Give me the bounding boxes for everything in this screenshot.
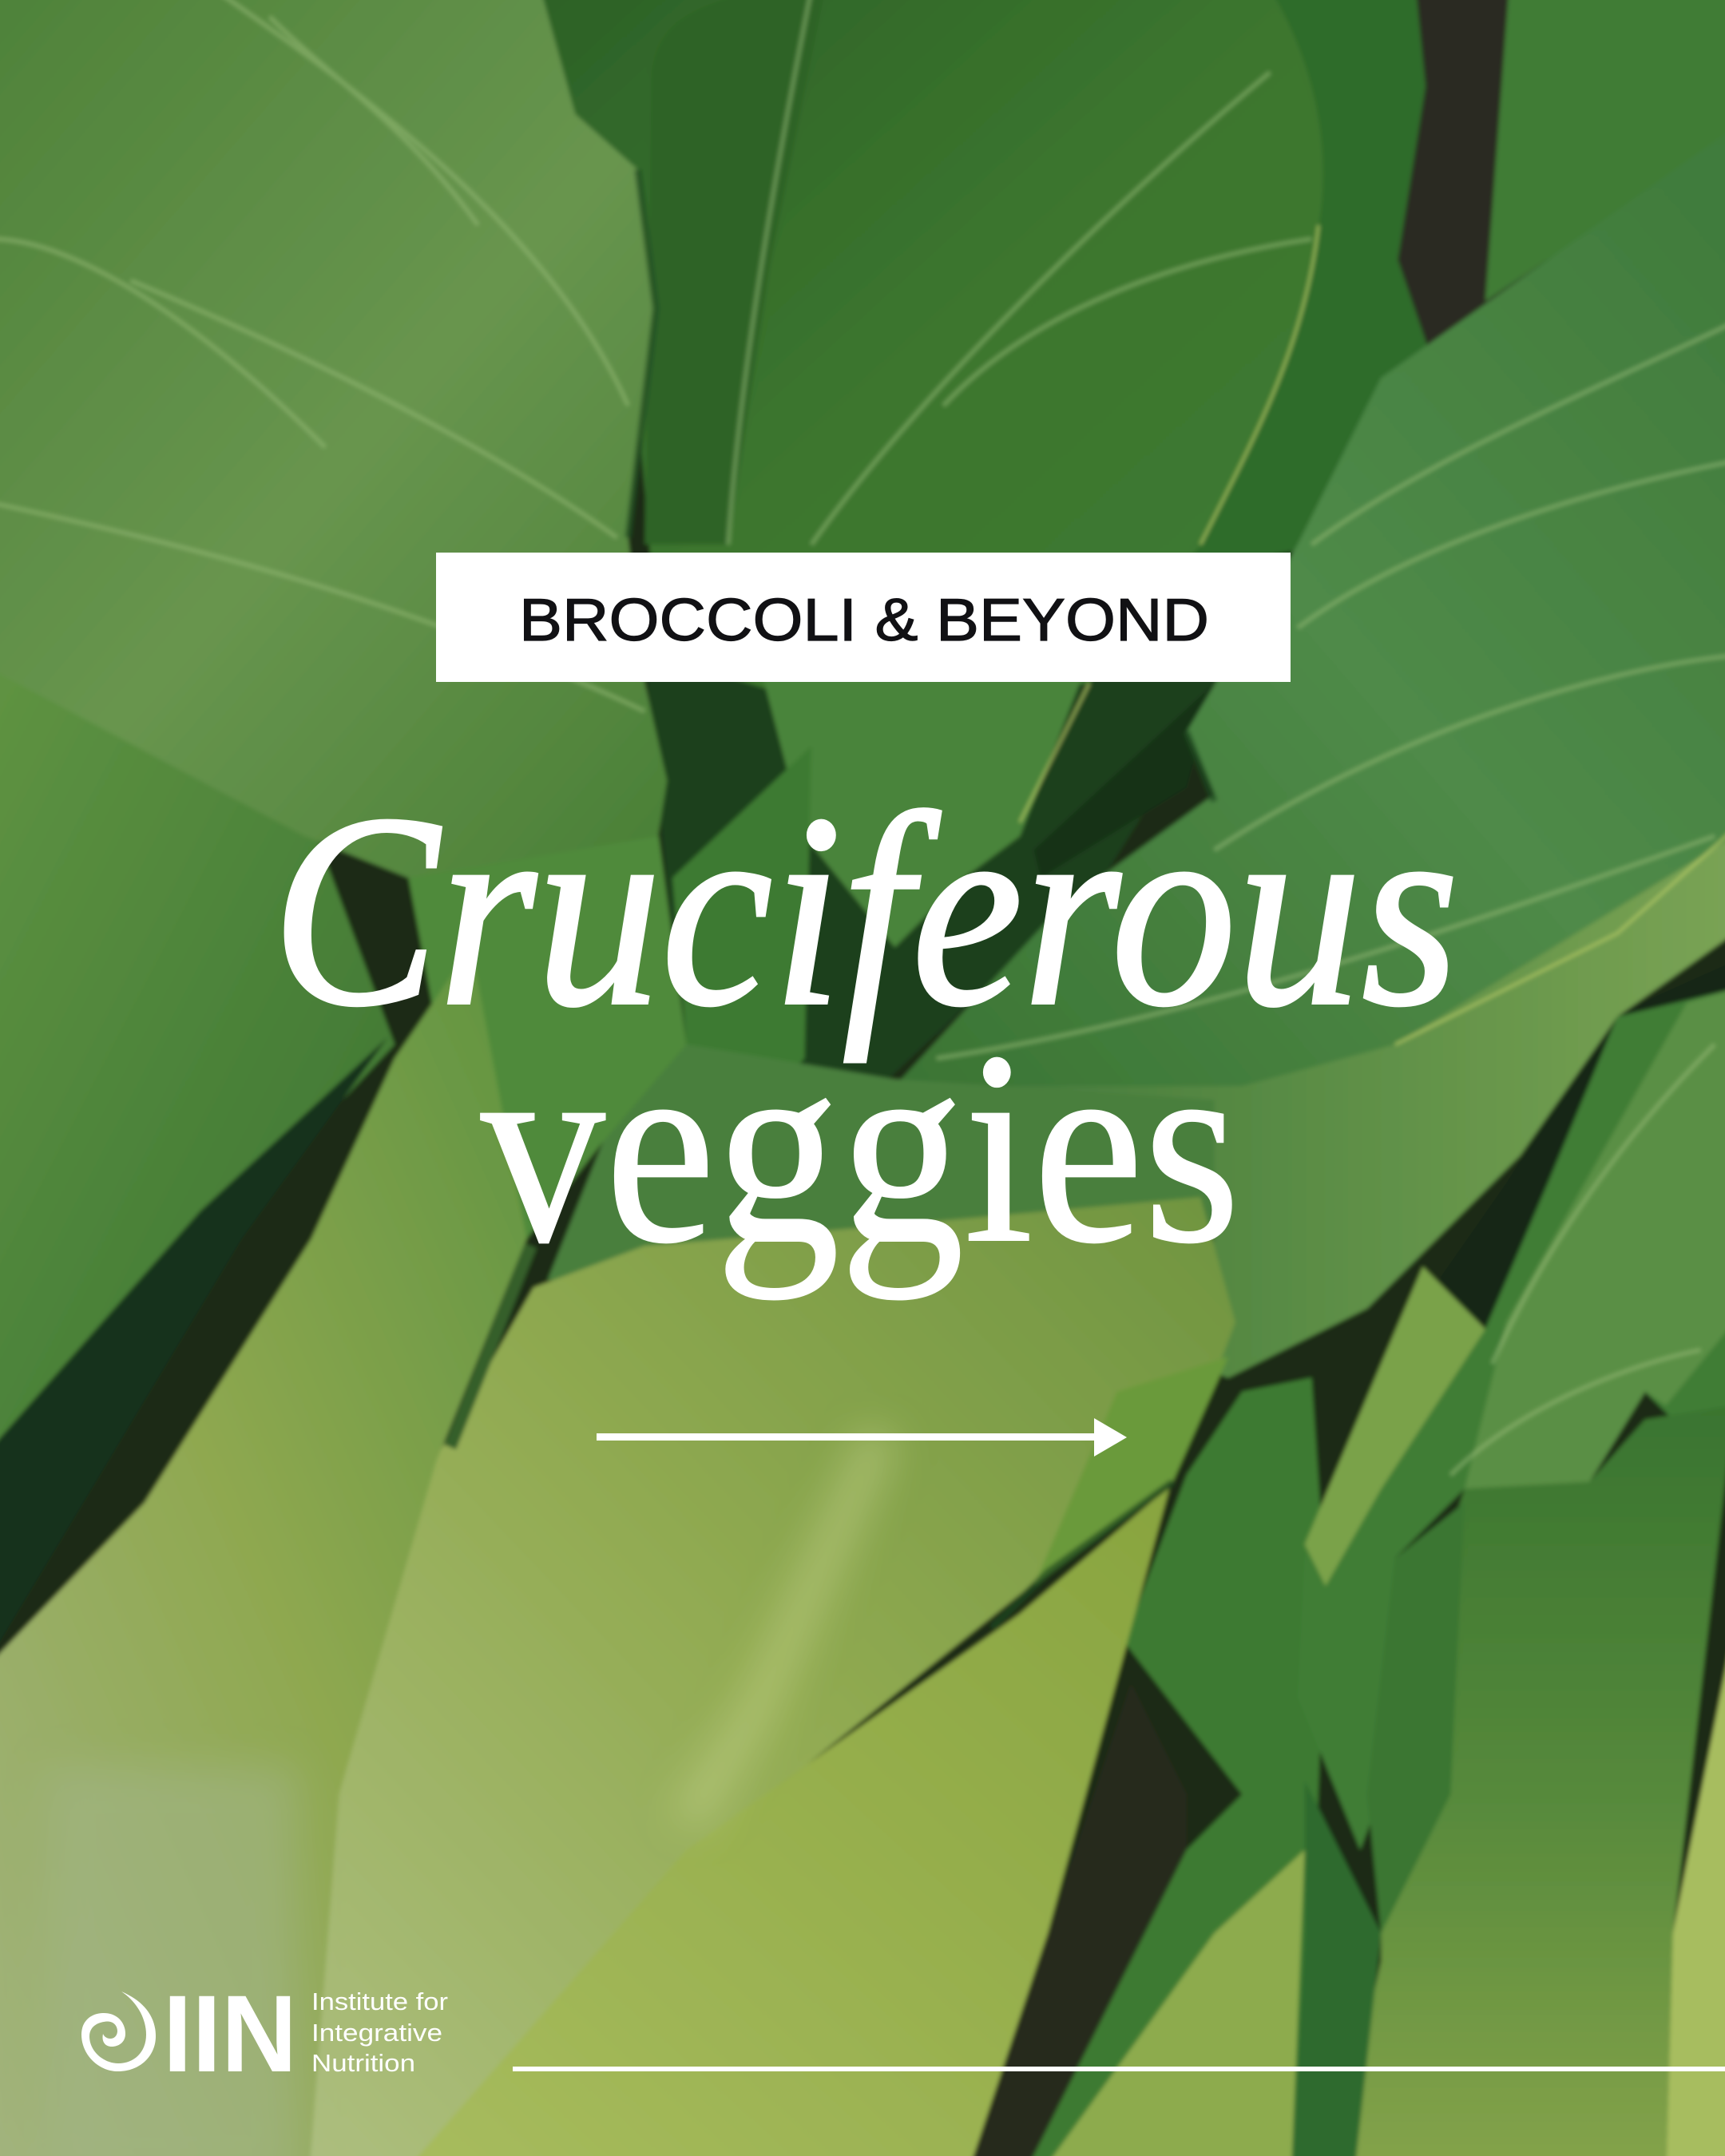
stalk dark ribbing bbox=[1367, 1503, 1465, 1933]
top left big leaf bbox=[0, 0, 667, 961]
logo name text: Institute for bbox=[311, 1988, 448, 2015]
label box: Broccoli & Beyond: BROCCOLI & BEYOND bbox=[519, 586, 1209, 653]
right lower dark gap bbox=[1409, 961, 1725, 1377]
dark leaf fold lines bbox=[628, 169, 1215, 1627]
title: Cruciferous: Cruciferous bbox=[272, 758, 1459, 1063]
light streak on central stalk bbox=[687, 1433, 881, 1822]
dark band between stalks bbox=[450, 1246, 531, 1447]
left stalk bbox=[0, 947, 526, 2156]
footer rule bbox=[513, 2067, 1725, 2071]
left gap leaves between stalks bbox=[1291, 1781, 1381, 2156]
central large stalk bbox=[297, 1197, 1235, 2156]
logo name text bbox=[311, 1988, 448, 2077]
lower middle-right stalk bbox=[1033, 1850, 1305, 2156]
main stalk far side leaf bbox=[894, 836, 1725, 1377]
lighter far right leaf panel bbox=[1465, 989, 1725, 1489]
arrow bbox=[597, 1418, 1127, 1456]
logo wordmark: IIN bbox=[163, 1973, 297, 2095]
far right leaf bbox=[1298, 989, 1725, 1850]
dark shadow lower left bbox=[0, 1037, 387, 1655]
shade on centre leaf bbox=[644, 0, 825, 545]
logo name text: Integrative bbox=[311, 2019, 442, 2047]
label box: Broccoli & Beyond bbox=[436, 553, 1291, 682]
centre leaf lower flap bbox=[763, 676, 1082, 947]
top right corner leaf bbox=[1485, 0, 1725, 302]
title: veggies: veggies bbox=[481, 995, 1240, 1300]
blueish lower-left wash bbox=[47, 1766, 297, 2156]
icon: spiral bbox=[81, 1992, 156, 2071]
back leaf top right bbox=[1187, 0, 1431, 573]
bottom dark gap bbox=[964, 1683, 1187, 2156]
folded leaf bbox=[1305, 1266, 1485, 1586]
lower right leaf behind stalks bbox=[1020, 1377, 1326, 2156]
right stalk bbox=[1332, 1405, 1725, 2156]
lower left leaf bbox=[0, 669, 395, 1447]
logo name text: Nutrition bbox=[311, 2049, 415, 2077]
centre leaf left flap bbox=[672, 746, 811, 1100]
leaf tip overlapping stalk bbox=[409, 836, 689, 1239]
moss green behind veggies bbox=[548, 1044, 1215, 1281]
centre top leaf bbox=[526, 0, 1322, 711]
top right dark gap bbox=[1381, 0, 1534, 378]
logo: Institute for Integrative Nutrition bbox=[81, 1973, 448, 2095]
far right edge stalk bbox=[1666, 1627, 1725, 2156]
stalk green edge bbox=[1033, 1357, 1228, 1586]
highlight leaf edges bbox=[1020, 225, 1725, 1044]
dark centre fold bbox=[1033, 684, 1215, 878]
dark gap in centre bbox=[644, 656, 1242, 1086]
leaf veins bbox=[0, 0, 1725, 1475]
lowest central stalk bbox=[395, 1486, 1170, 2156]
right big leaf bbox=[894, 128, 1725, 1100]
